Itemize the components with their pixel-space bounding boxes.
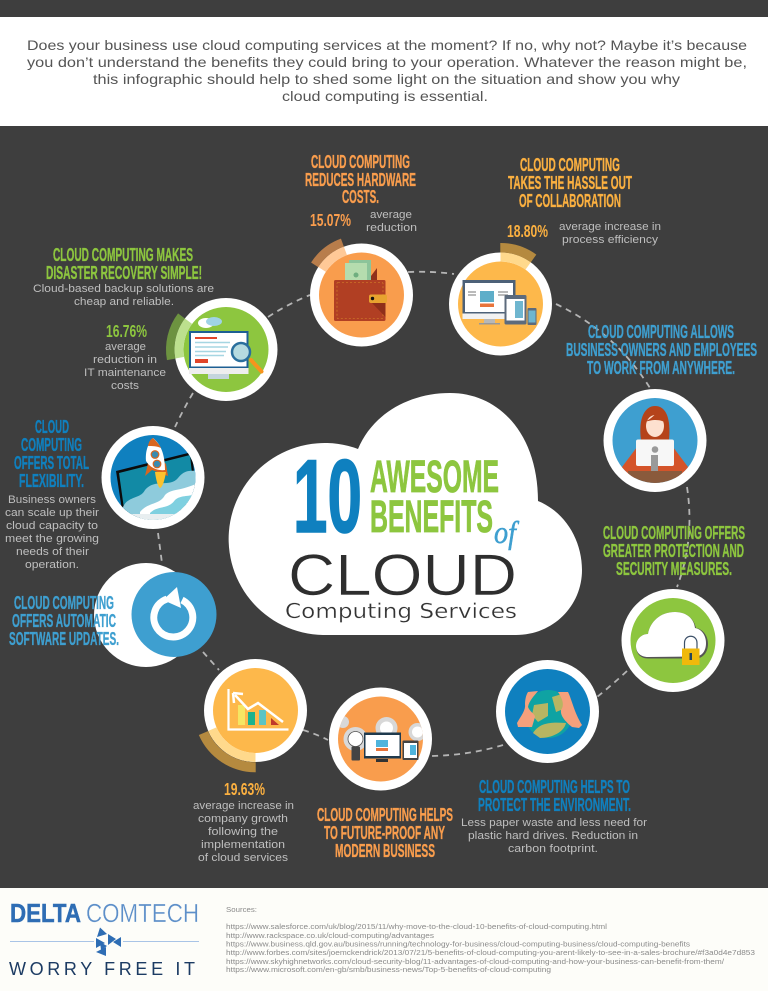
heading: OFFERS AUTOMATIC [12, 611, 116, 631]
description: meet the growing [5, 533, 99, 545]
heading [317, 805, 453, 861]
logo: Delta Comtech: COMTECH [86, 898, 199, 928]
heading [46, 245, 202, 283]
sources: https://www.business.qld.gov.au/business/running/technology-for-business/cloud-computing-business/cloud-computing-benefits [226, 940, 690, 948]
panel: software updates [9, 563, 216, 667]
statistic caption: reduction [366, 222, 417, 234]
heading: CLOUD [35, 417, 69, 437]
title awesome benefits: AWESOME [370, 451, 499, 502]
intro panel: you don’t understand the benefits they could bring to your operation. Whatever the reason might be, [27, 54, 747, 70]
description [33, 283, 214, 308]
central cloud title [229, 393, 582, 635]
statistic caption: of cloud services [198, 852, 289, 864]
icon: person at laptop [604, 389, 706, 492]
icon: rocket and laptop [102, 426, 204, 534]
icon: wallet [284, 218, 439, 372]
statistic 18.80%: 18.80% [507, 221, 548, 241]
description: Business owners [8, 494, 97, 506]
panel: hardware costs [284, 152, 439, 372]
sources: http://www.forbes.com/sites/joemckendrick/2013/07/21/5-benefits-of-cloud-computing-you-arent-likely-to-see-in-a-sales-brochure/#f3a0d4e7d853 [226, 948, 755, 957]
intro panel [0, 17, 768, 126]
icon: cloud with padlock [622, 589, 724, 692]
sources: https://www.microsoft.com/en-gb/smb/business-news/Top-5-benefits-of-cloud-computing [226, 965, 551, 974]
statistic caption: reduction in [93, 354, 157, 366]
heading: CLOUD COMPUTING MAKES [53, 245, 193, 265]
heading [305, 152, 416, 207]
logo: Delta Comtech [9, 898, 199, 979]
panel: disaster recovery [33, 245, 291, 414]
heading [566, 322, 757, 378]
heading [14, 417, 89, 491]
title cloud: CLOUD [288, 543, 517, 608]
heading: TO FUTURE-PROOF ANY [324, 823, 445, 843]
description: cloud capacity to [6, 520, 98, 532]
title number 10: 10 [293, 439, 362, 555]
heading [9, 593, 119, 649]
heading: COSTS. [342, 187, 379, 207]
logo: Delta Comtech: DELTA [10, 898, 81, 928]
sources: https://www.salesforce.com/uk/blog/2015/11/why-move-to-the-cloud-10-benefits-of-cloud-computing.html [226, 922, 607, 931]
icon: refresh arrow [94, 563, 216, 667]
logo: Delta Comtech: WORRY FREE IT [9, 959, 195, 979]
statistic caption: average [105, 341, 146, 353]
title awesome benefits [370, 451, 499, 542]
heading: CLOUD COMPUTING [14, 593, 114, 613]
heading: TAKES THE HASSLE OUT [508, 173, 632, 193]
panel: future-proof [317, 688, 453, 861]
panel: work from anywhere [566, 322, 757, 492]
panel: environment [461, 660, 647, 855]
heading: CLOUD COMPUTING [311, 152, 410, 172]
statistic caption: company growth [198, 813, 288, 825]
panel: security [603, 523, 745, 692]
intro panel: this infographic should help to shed some light on the situation and show you why [93, 71, 680, 87]
statistic caption: costs [111, 380, 140, 392]
sources [226, 905, 755, 974]
description: Less paper waste and less need for [461, 817, 647, 829]
heading: DISASTER RECOVERY SIMPLE! [46, 263, 202, 283]
heading: FLEXIBILITY. [19, 471, 84, 491]
description: carbon footprint. [508, 843, 598, 855]
description: Cloud-based backup solutions are [33, 283, 214, 295]
description [5, 494, 99, 571]
icon: devices [444, 248, 557, 360]
statistic 16.76%: 16.76% [106, 321, 147, 341]
statistic caption: IT maintenance [84, 367, 166, 379]
statistic caption [193, 800, 294, 864]
icon: growth chart [199, 654, 312, 767]
sources: Sources: [226, 905, 257, 914]
statistic caption: average increase in [193, 800, 294, 812]
statistic caption: average [370, 209, 412, 221]
title of: of [494, 514, 520, 550]
intro panel: Does your business use cloud computing services at the moment? If no, why not? Maybe it’s because [27, 37, 747, 53]
heading: SOFTWARE UPDATES. [9, 629, 119, 649]
panel: collaboration [444, 155, 661, 360]
statistic 19.63%: 19.63% [224, 779, 265, 799]
statistic caption [559, 221, 661, 246]
sources: http://www.rackspace.co.uk/cloud-computing/advantages [226, 931, 434, 940]
heading: CLOUD COMPUTING [520, 155, 620, 175]
cloud shape [229, 393, 582, 635]
description: plastic hard drives. Reduction in [468, 830, 638, 842]
heading: MODERN BUSINESS [335, 841, 435, 861]
icon: gears and devices [329, 688, 432, 790]
description: needs of their [16, 546, 89, 558]
statistic caption: implementation [201, 839, 285, 851]
description [461, 817, 647, 855]
footer panel [0, 888, 768, 991]
heading [478, 777, 631, 815]
heading [603, 523, 745, 579]
heading: CLOUD COMPUTING HELPS [317, 805, 453, 825]
heading: OF COLLABORATION [519, 191, 621, 211]
description: operation. [25, 559, 79, 571]
heading [508, 155, 632, 211]
statistic caption: process efficiency [562, 234, 659, 246]
title computing services: Computing Services [285, 599, 517, 623]
statistic caption [366, 209, 417, 234]
sources: https://www.skyhighnetworks.com/cloud-security-blog/11-advantages-of-cloud-computing-and-how-your-business-can-benefit-from-them/ [226, 957, 725, 966]
heading: COMPUTING [21, 435, 82, 455]
heading: PROTECT THE ENVIRONMENT. [478, 795, 631, 815]
description: can scale up their [5, 507, 99, 519]
intro panel: cloud computing is essential. [282, 88, 488, 104]
heading: REDUCES HARDWARE [305, 170, 416, 190]
statistic caption [84, 341, 166, 392]
heading: OFFERS TOTAL [14, 453, 89, 473]
statistic caption: average increase in [559, 221, 661, 233]
description: cheap and reliable. [74, 296, 174, 308]
heading: CLOUD COMPUTING HELPS TO [479, 777, 630, 797]
statistic caption: following the [208, 826, 278, 838]
statistic 15.07%: 15.07% [310, 210, 351, 230]
panel: company growth [193, 654, 312, 864]
dashed connectors [158, 272, 689, 756]
title awesome benefits: BENEFITS [370, 491, 493, 542]
icon: monitor and magnifier [161, 285, 291, 414]
icon: hands holding globe [496, 660, 599, 763]
panel: flexibility [5, 417, 204, 571]
